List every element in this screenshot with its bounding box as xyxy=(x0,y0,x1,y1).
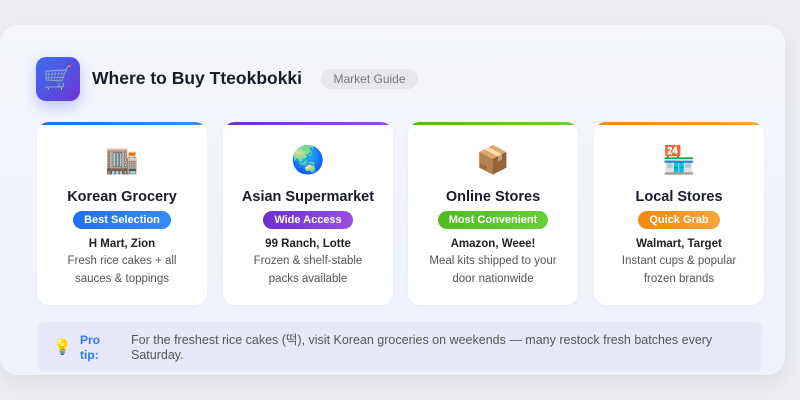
panel: online stores xyxy=(408,122,578,305)
panel: korean grocery xyxy=(37,122,207,305)
panel: online stores: 📦 xyxy=(476,145,510,175)
icon: light bulb: 💡 xyxy=(53,339,72,356)
panel: online stores: Online Stores xyxy=(446,189,540,205)
panel: asian supermarket: 🌏 xyxy=(291,145,325,175)
panel: online stores: Meal kits shipped to your xyxy=(429,255,557,267)
panel: asian supermarket: packs available xyxy=(269,273,347,285)
panel: local stores xyxy=(594,122,764,305)
panel: korean grocery: Korean Grocery xyxy=(67,189,177,205)
panel: local stores: Walmart, Target xyxy=(636,238,722,250)
panel: asian supermarket: Asian Supermarket xyxy=(242,189,374,205)
icon: shopping cart xyxy=(36,57,80,101)
panel: asian supermarket: Wide Access xyxy=(274,214,342,226)
tip text xyxy=(131,333,712,362)
panel: asian supermarket xyxy=(223,122,393,305)
icon: shopping cart: 🛒 xyxy=(43,65,73,92)
panel: local stores: frozen brands xyxy=(644,273,714,285)
panel: local stores: Local Stores xyxy=(635,189,723,205)
badge: market guide xyxy=(321,69,418,89)
tip text: For the freshest rice cakes (떡), visit Korean groceries on weekends — many restock fresh batches every xyxy=(131,333,712,347)
panel: local stores: Quick Grab xyxy=(649,214,709,226)
panel: online stores: Most Convenient xyxy=(449,214,537,226)
panel: korean grocery: H Mart, Zion xyxy=(89,238,155,250)
panel: online stores: Amazon, Weee! xyxy=(451,238,535,250)
panel: asian supermarket: 99 Ranch, Lotte xyxy=(265,238,351,250)
panel: asian supermarket: Frozen & shelf-stable xyxy=(254,255,362,267)
panel: korean grocery: 🏬 xyxy=(105,145,139,175)
panel: korean grocery: Best Selection xyxy=(84,214,160,226)
panel: local stores: 🏪 xyxy=(662,145,696,175)
panel: local stores: Instant cups & popular xyxy=(622,255,736,267)
panel: korean grocery: Fresh rice cakes + all xyxy=(68,255,176,267)
badge: market guide: Market Guide xyxy=(333,72,406,86)
panel: online stores: door nationwide xyxy=(452,273,534,285)
label: pro tip: Pro tip: xyxy=(80,333,100,362)
callout: pro tip xyxy=(37,322,763,372)
panel: korean grocery: sauces & toppings xyxy=(75,273,169,285)
tip text: Saturday. xyxy=(131,348,184,362)
title: Where to Buy Tteokbokki xyxy=(92,68,302,88)
